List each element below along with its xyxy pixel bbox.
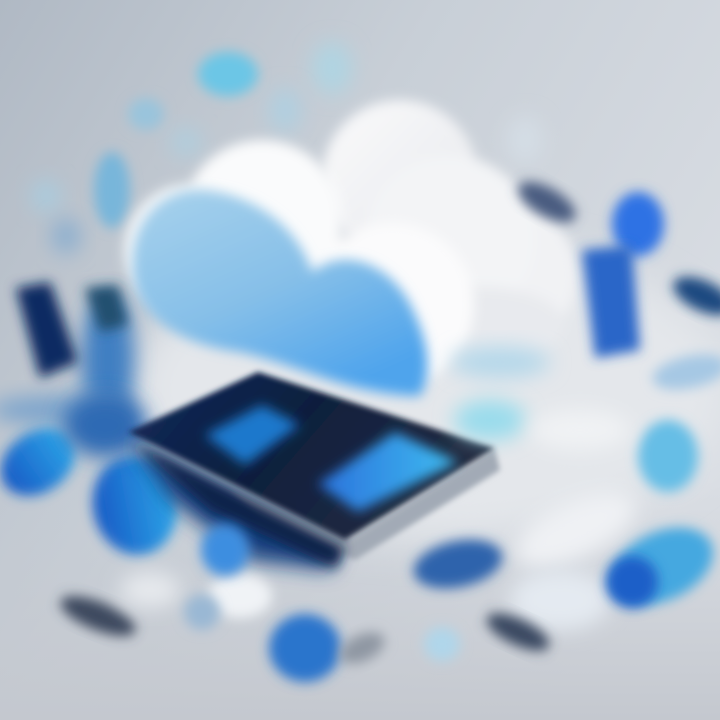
tablet body [128,372,495,540]
right devices [512,174,720,492]
white papers lower right [504,410,646,630]
left blue star of devices [0,282,185,562]
tablet upper screen [205,405,300,465]
blue shadow under tablet [130,440,340,570]
tablet cyan reflection [454,400,526,440]
cloud lower glow [450,346,550,378]
front cloud white rim [124,140,474,387]
floating light blue squares [31,42,543,254]
tablet lower screen [318,432,458,512]
tablet silver edge [230,450,500,560]
bottom devices [56,512,720,682]
back white cloud [322,100,577,363]
front cloud blue face [133,190,428,396]
tablet dark edge [130,440,345,568]
tablet [128,372,526,568]
